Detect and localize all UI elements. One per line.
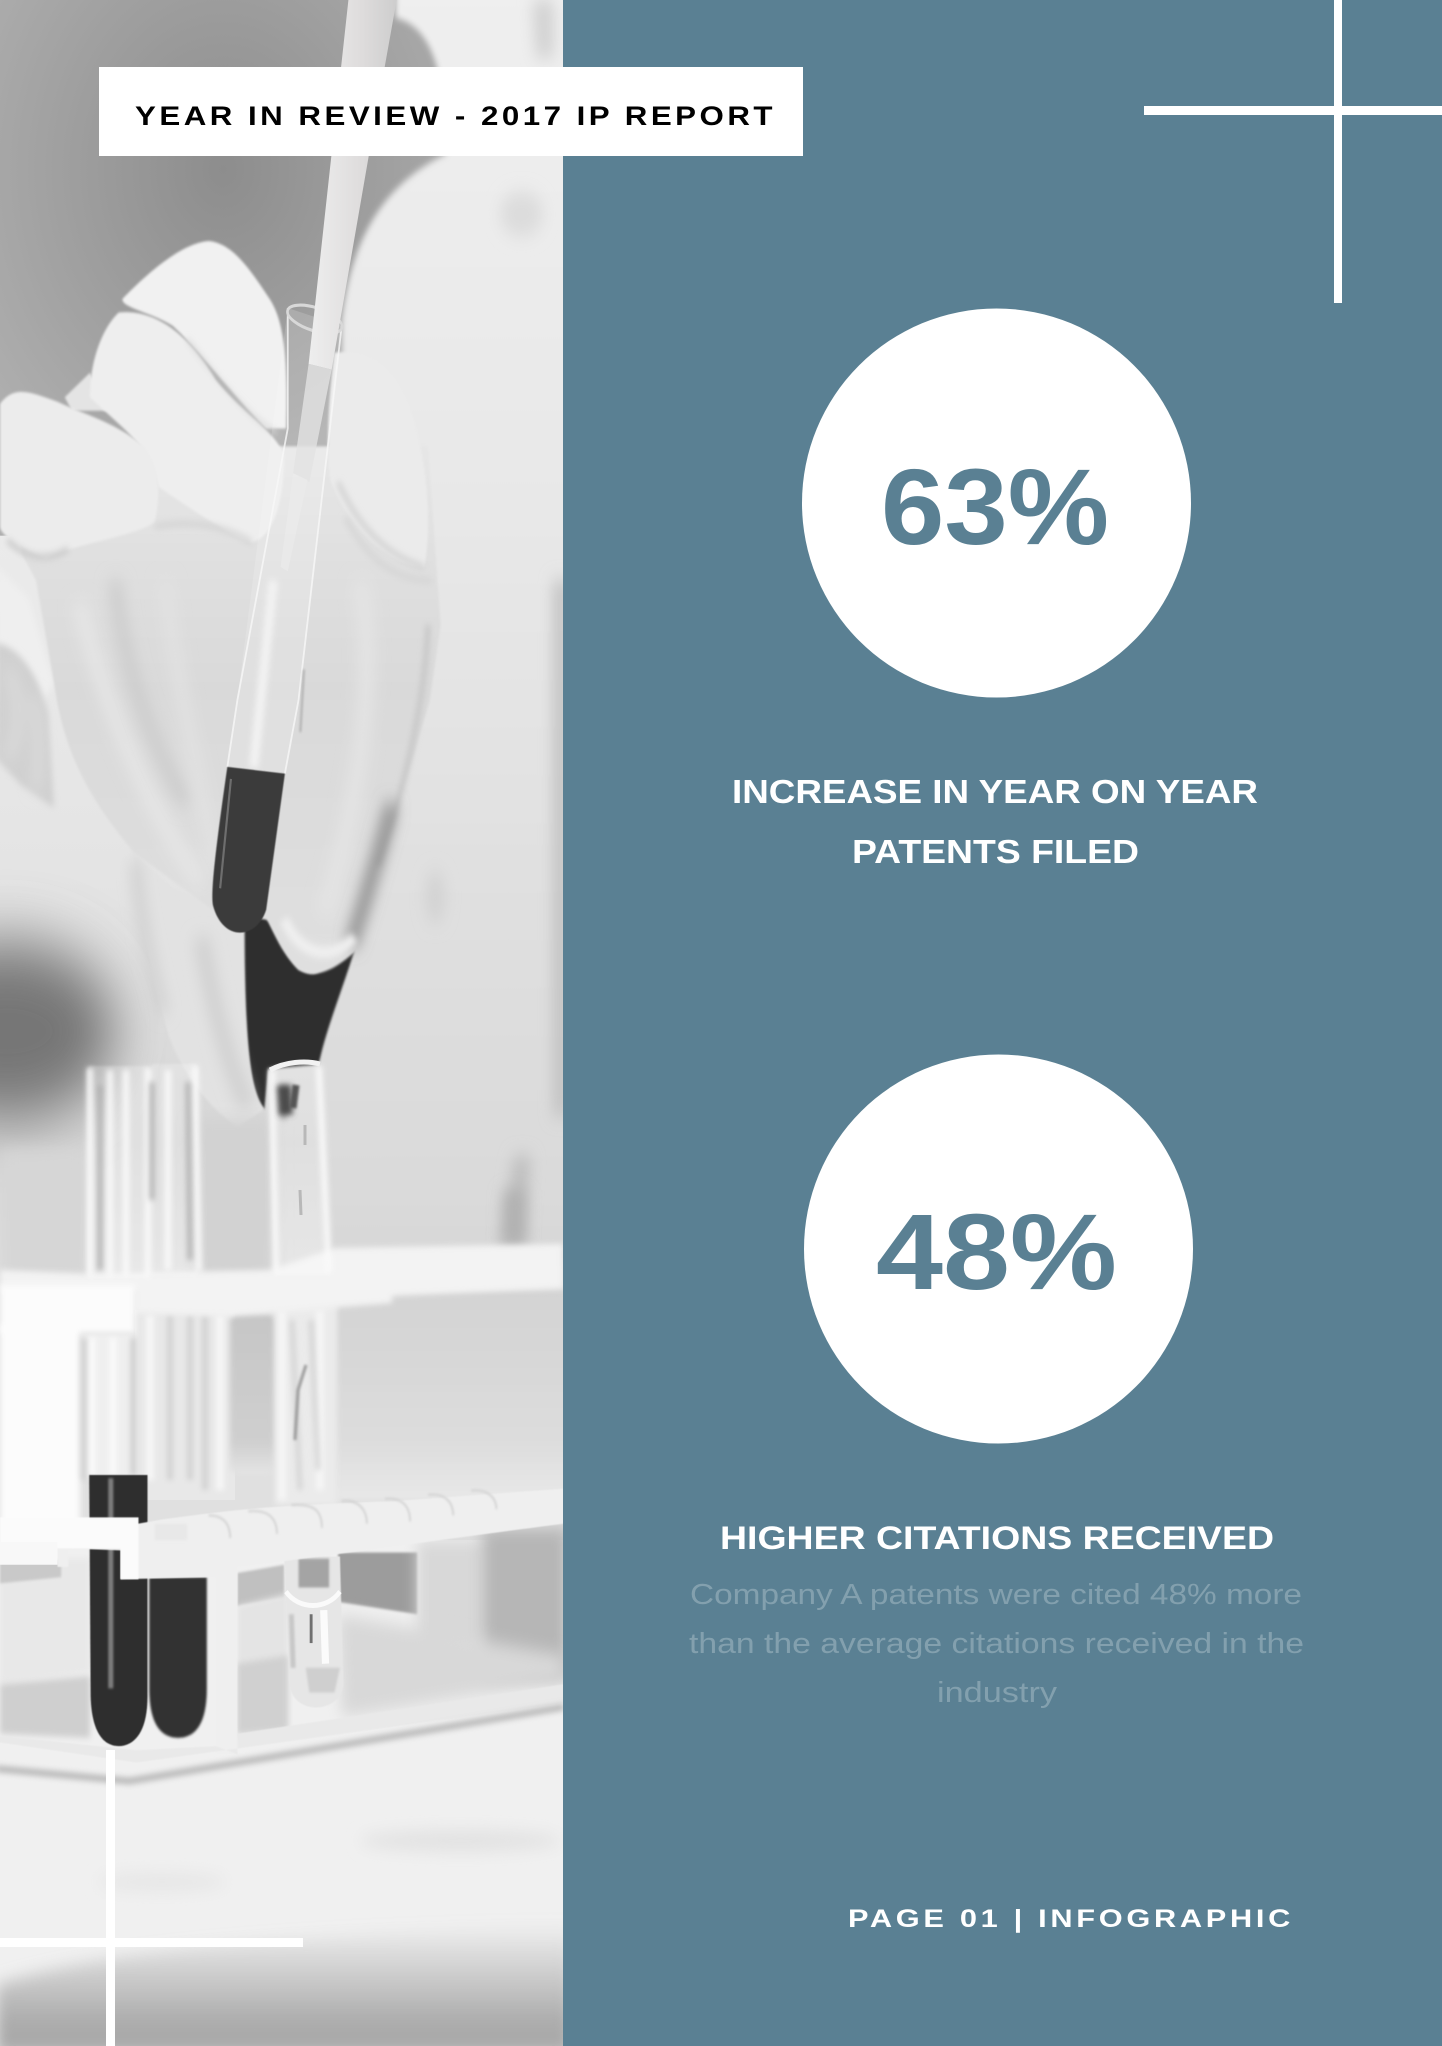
text block: citations description: than the average citations received in the [689, 1628, 1304, 1660]
photo part: rack base, dark sample tubes and bench [0, 1475, 572, 2046]
bench gradient [0, 1936, 563, 2046]
decorative cross: top right [1144, 0, 1442, 303]
pinky finger with streaks [0, 643, 54, 808]
pale gap left of wrist [0, 567, 54, 737]
decorative cross: bottom left [0, 1750, 303, 2046]
sleeve [201, 966, 264, 1114]
stat circle: 48%: 48% [876, 1191, 1117, 1312]
stat caption: patents filed: INCREASE IN YEAR ON YEAR [732, 773, 1258, 810]
stat circle: 48% [804, 1054, 1193, 1444]
title banner [99, 67, 803, 156]
thumb [328, 352, 428, 567]
glove body [22, 446, 441, 974]
footer label: PAGE 01 | INFOGRAPHIC [848, 1905, 1294, 1933]
stat caption: patents filed: PATENTS FILED [852, 833, 1139, 870]
liquid in hanging tube [212, 767, 285, 933]
stat circle: 63% [802, 308, 1191, 698]
pipette [309, 0, 397, 370]
dark gap behind glove [245, 915, 354, 1109]
stat caption: patents filed [732, 773, 1258, 870]
text block: citations description: Company A patents were cited 48% more [690, 1579, 1302, 1611]
dark tubes [149, 1577, 207, 1738]
photo part: floor backdrop and shelf of the rack [0, 1120, 575, 1545]
stat circle: 63%: 63% [881, 446, 1109, 567]
rack shelf [0, 1244, 563, 1316]
panel: teal background [563, 0, 1442, 2046]
coat [338, 0, 563, 759]
heading: higher citations: HIGHER CITATIONS RECEIVED [720, 1520, 1274, 1556]
clear tube [284, 1557, 344, 1707]
fingers [65, 373, 108, 411]
text block: citations description: industry [937, 1677, 1058, 1709]
glass tube [272, 309, 340, 446]
photo: gloved hand holding test tube over rack [0, 0, 576, 2046]
photo part: rack tubes standing above the shelf [87, 1062, 330, 1278]
photo part: hand, glove, sleeve and hanging tube [0, 0, 576, 1295]
rack frame [57, 1490, 563, 1732]
text block: citations description [689, 1579, 1304, 1709]
title banner: YEAR IN REVIEW - 2017 IP REPORT [135, 101, 776, 131]
